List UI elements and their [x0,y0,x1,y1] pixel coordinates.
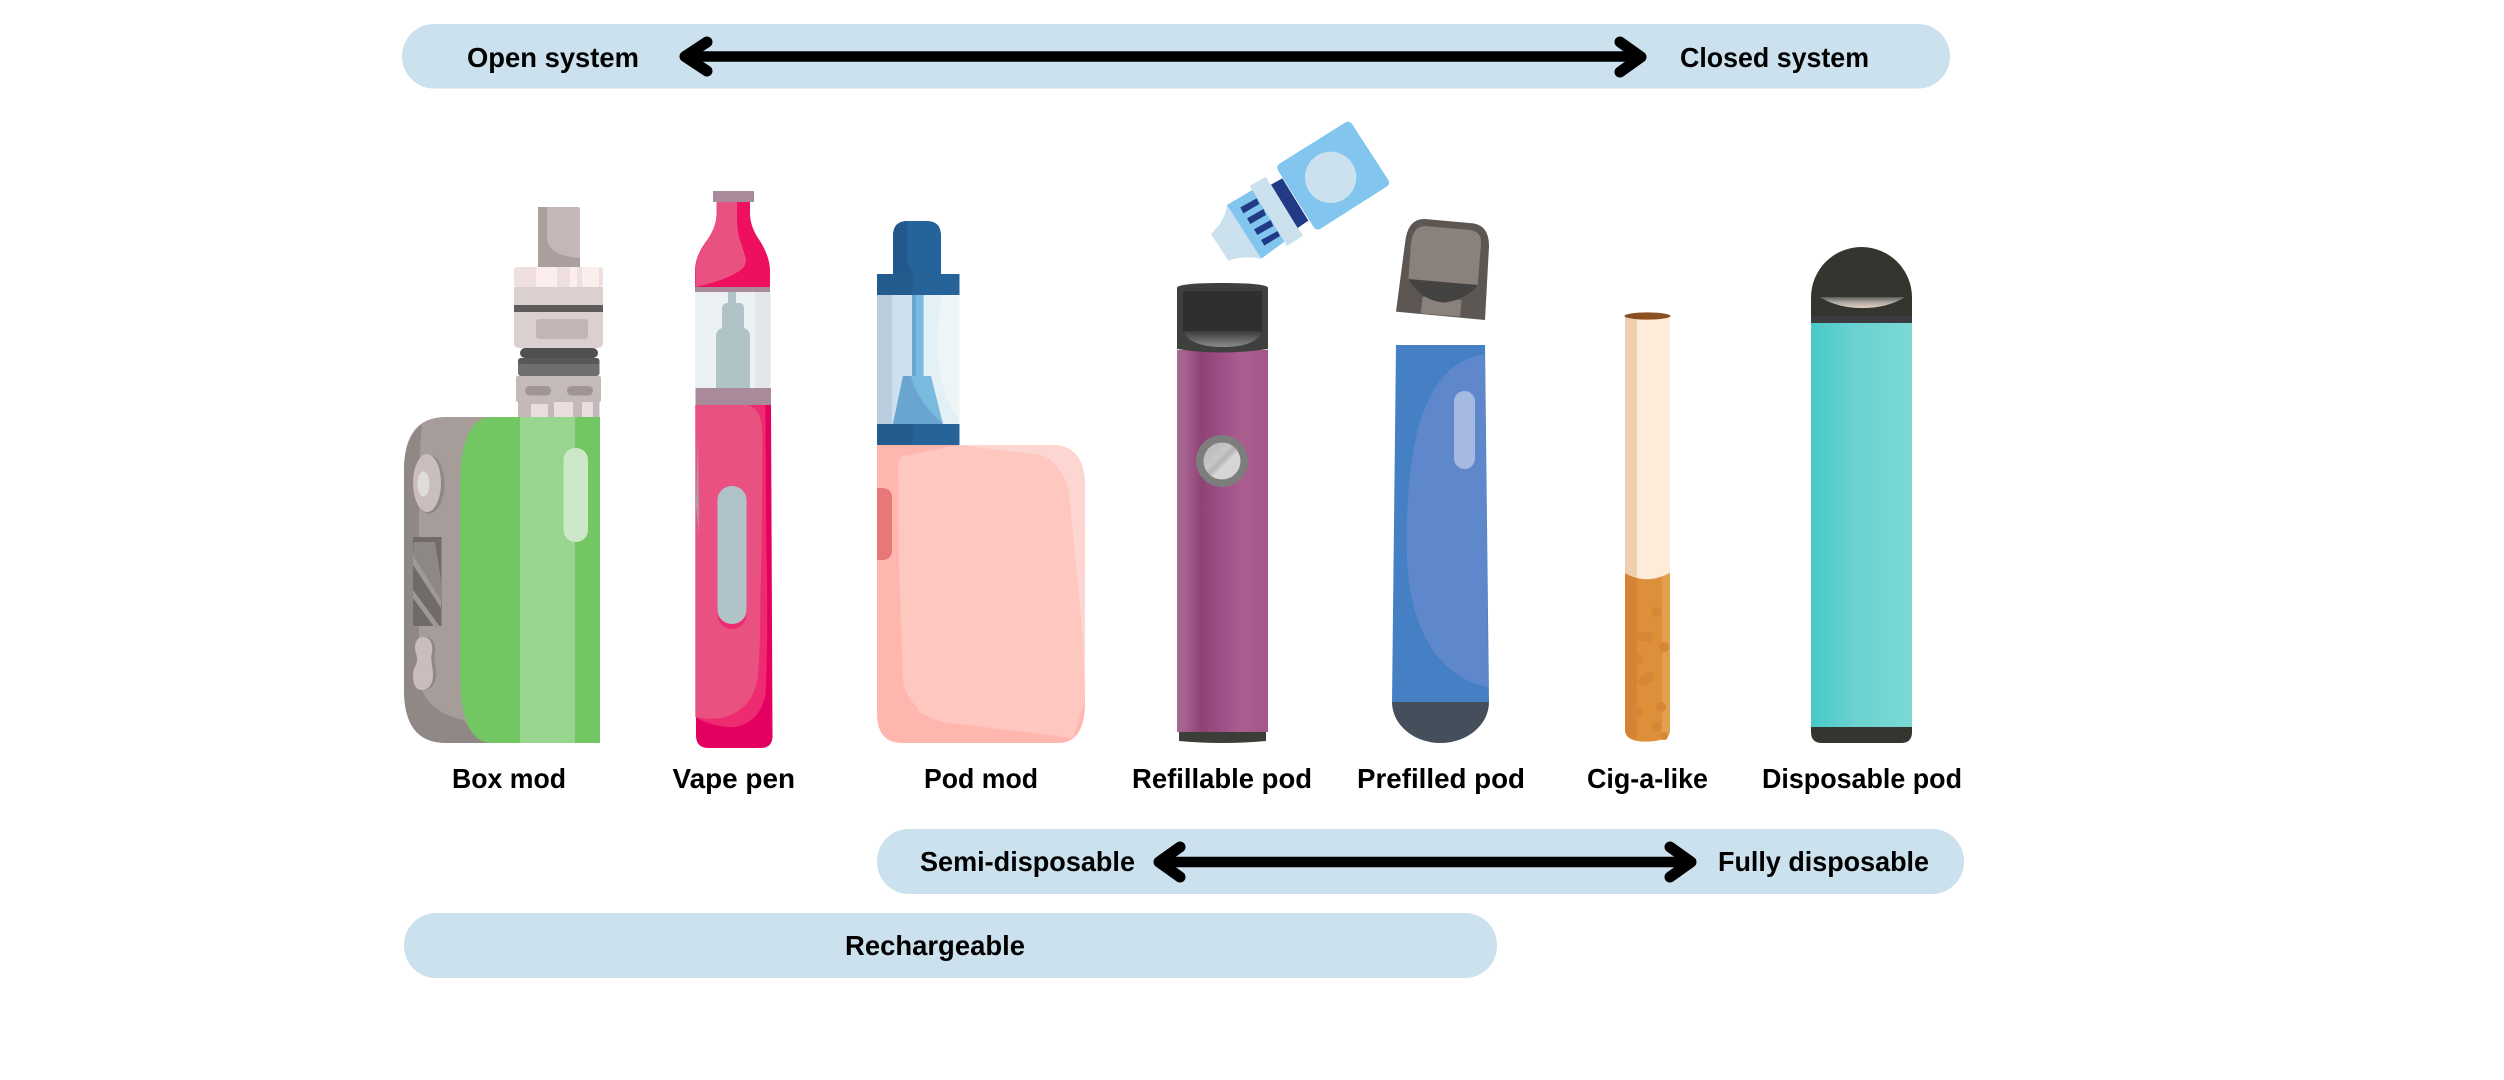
device: vape pen [695,191,772,748]
tobacco section [1625,570,1670,742]
top [1811,247,1912,323]
device labels: Cig-a-like [1587,763,1708,794]
device labels: Box mod [452,763,566,794]
device: refillable pod [1177,283,1268,743]
device: cig-a-like [1624,312,1670,742]
device labels: Disposable pod [1762,763,1962,794]
label: semi-disposable: Semi-disposable [920,846,1135,877]
fire button [414,454,444,514]
bottle top [695,202,770,287]
side button [877,488,892,560]
body [1811,323,1912,727]
window [718,486,746,629]
body [877,445,1085,743]
device: box mod [404,207,603,743]
tank [877,221,960,445]
window [1454,391,1475,469]
arrow: open to closed [685,42,1641,72]
device labels: Vape pen [672,763,795,794]
tank [514,207,603,417]
label: open system: Open system [467,42,639,73]
bar: open to closed system [402,24,1950,88]
glass tank [695,292,770,388]
body [1177,350,1268,732]
device labels: Pod mod [924,763,1038,794]
device labels [452,763,1962,794]
adjust buttons [413,637,436,690]
bar: rechargeable [404,913,1497,978]
device labels: Prefilled pod [1357,763,1525,794]
label: rechargeable: Rechargeable [845,930,1025,961]
bottom ring [1179,730,1266,743]
device: pod mod [877,221,1085,743]
body [1392,345,1489,702]
pod top [1396,219,1489,320]
label: fully disposable: Fully disposable [1718,846,1929,877]
device labels: Refillable pod [1132,763,1312,794]
filter section [1625,316,1670,579]
cap [713,191,754,202]
bar: semi to fully disposable [877,829,1964,894]
label: closed system: Closed system [1680,42,1869,73]
icon: e-liquid bottle [1211,122,1389,261]
green panel [460,417,600,743]
body [695,405,772,748]
button [1196,435,1248,487]
device: disposable pod [1811,247,1912,743]
device: prefilled pod [1392,219,1489,743]
grey body [404,417,506,743]
cap [1177,283,1268,352]
screen [413,537,442,626]
base [1811,727,1912,743]
arrow: semi to fully [1159,847,1691,877]
